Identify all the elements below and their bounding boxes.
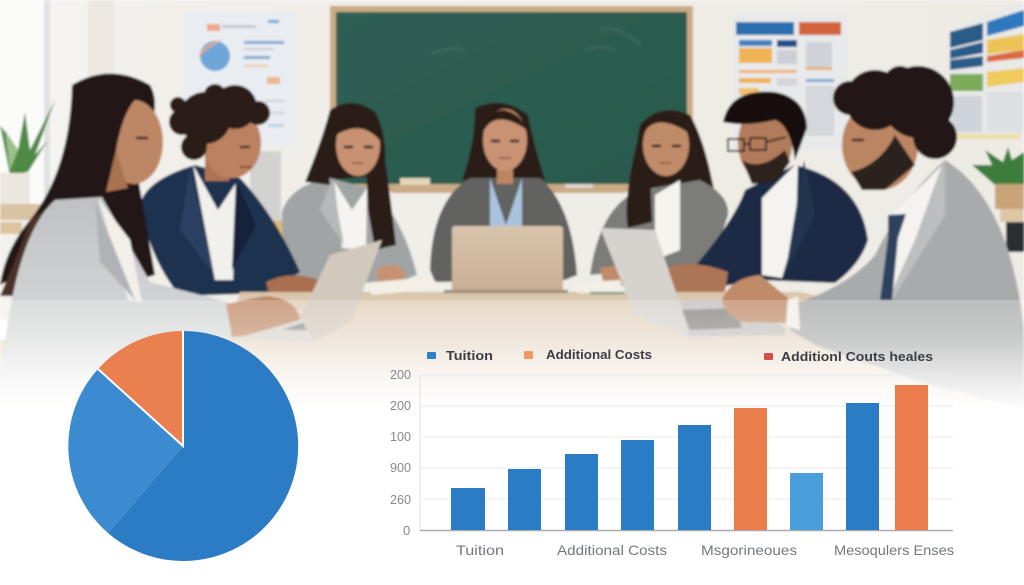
right laptop — [600, 228, 785, 337]
left laptop — [237, 240, 382, 342]
y axis labels: 100 — [390, 429, 411, 444]
chart legend: Tuition — [446, 348, 493, 363]
white lower background — [0, 410, 1024, 585]
centre wall poster — [733, 15, 848, 150]
woman left blazer and arm — [0, 197, 232, 400]
centre laptop — [444, 226, 568, 293]
x axis labels: Additional Costs — [557, 542, 667, 558]
right potted plant — [972, 147, 1024, 252]
x axis labels: Tuition — [456, 542, 504, 558]
grey cabinet and yellow chair — [250, 151, 284, 243]
pie slice: orange — [98, 331, 183, 446]
x axis labels: Mesoqulers Enses — [834, 542, 954, 558]
woman left shirt and lapel — [95, 198, 142, 302]
x axis labels: Msgorineoues — [701, 542, 797, 558]
chart legend — [427, 347, 933, 364]
chalkboard — [330, 6, 693, 193]
person: man with glasses and navy blazer — [666, 92, 868, 300]
person: woman on far left, hair and face — [0, 74, 163, 296]
chart legend: Additionl Couts heales — [781, 349, 933, 364]
chart legend: Additional Costs — [546, 347, 652, 362]
notebook and papers — [364, 277, 624, 295]
x axis labels — [456, 542, 954, 558]
y axis labels: 0 — [403, 523, 410, 538]
pie slice: large blue — [108, 331, 298, 561]
person: woman third from left — [282, 103, 417, 290]
bars — [451, 385, 928, 530]
person: man with curly hair and navy blazer — [140, 84, 327, 301]
classroom photo scene — [0, 0, 1024, 420]
person: woman centre — [430, 103, 577, 282]
right wall poster — [948, 0, 1024, 140]
wall background — [0, 0, 1024, 320]
woman left hand — [226, 296, 300, 337]
y axis labels: 200 — [390, 398, 411, 413]
white fade over lower photo — [0, 300, 1024, 410]
y axis labels: 200 — [390, 367, 411, 382]
pie chart — [68, 331, 298, 561]
left wall poster — [184, 13, 296, 145]
pie slice: mid blue — [68, 369, 183, 533]
y axis labels: 260 — [390, 492, 411, 507]
y axis labels: 900 — [390, 460, 411, 475]
window — [0, 0, 114, 210]
person: bearded man in grey suit, right foreground — [722, 66, 1024, 410]
y axis labels — [390, 367, 411, 538]
bar chart — [390, 367, 954, 558]
person: woman third from right — [590, 110, 728, 286]
table top — [0, 292, 1024, 420]
left potted plant — [0, 100, 55, 234]
